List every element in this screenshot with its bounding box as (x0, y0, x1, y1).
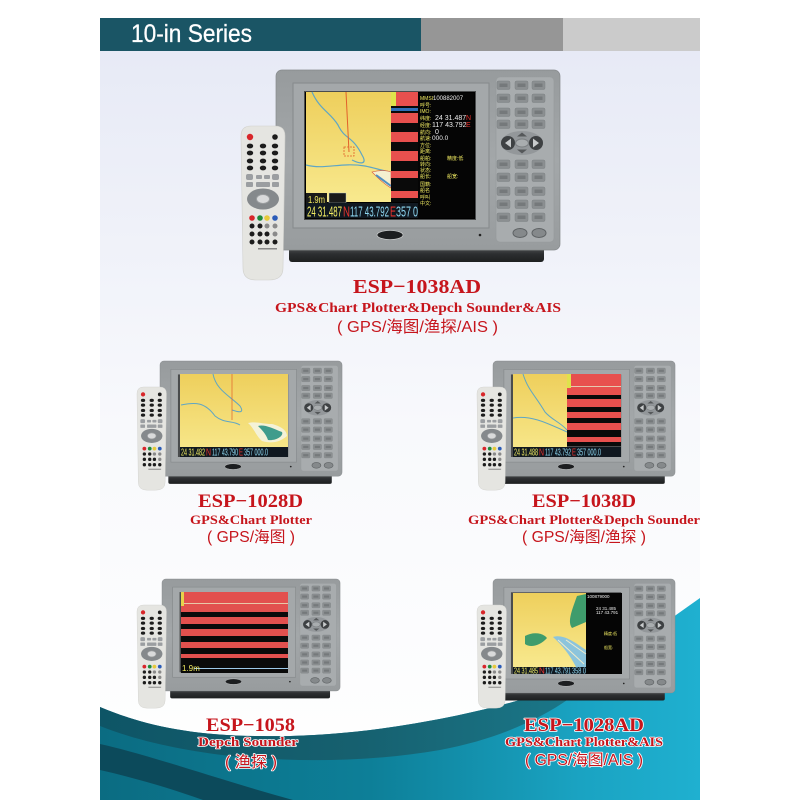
screen: chart, sounder and AIS: 100882007 (433, 96, 464, 102)
screen: chart, sounder and AIS: 24 31.487 (435, 115, 466, 122)
screen: chart, sounder and AIS: E (466, 122, 471, 129)
screen: chart and AIS: 100879000 (587, 594, 610, 599)
model name: ESP−1038AD (353, 276, 481, 298)
screen: chart and sounder: N (539, 448, 544, 458)
screen: chart, sounder and AIS: 24 31.487 (307, 204, 342, 220)
screen: chart, sounder and AIS: 精度:低 (447, 155, 463, 162)
device body (276, 70, 560, 262)
screen: chart and AIS (513, 593, 622, 676)
remote control (477, 387, 506, 490)
screen: chart, sounder and AIS (305, 92, 475, 220)
screen: chart, sounder and AIS: N (343, 204, 350, 220)
function description: GPS&Chart Plotter&AIS (505, 734, 663, 749)
screen: chart and AIS: N (539, 666, 545, 676)
screen: chart: N (206, 448, 211, 458)
function description: GPS&Chart Plotter&Depch Sounder (468, 512, 700, 527)
background panel (100, 51, 700, 800)
screen: chart, sounder and AIS: 距离: (420, 148, 431, 155)
screen: chart: E (239, 448, 243, 458)
screen: chart, sounder and AIS: 船长: (420, 173, 431, 180)
screen: chart, sounder and AIS: 呼号: (420, 102, 431, 109)
screen: chart, sounder and AIS: IMO: (420, 109, 431, 115)
chinese description: ( GPS/海图/AIS ) (525, 751, 643, 769)
screen: chart, sounder and AIS: MMSI: (420, 96, 434, 102)
screen: chart, sounder and AIS: 船名 (420, 187, 430, 194)
header bar (100, 18, 700, 51)
screen: chart and sounder: 117 43.792 (545, 448, 571, 458)
screen: chart, sounder and AIS: 方位: (420, 142, 431, 149)
screen: chart: 117 43.790 (212, 448, 238, 458)
screen: chart, sounder and AIS: 航速: (420, 135, 431, 142)
screen: chart, sounder and AIS: 船宽: (447, 173, 458, 180)
remote control (477, 605, 506, 708)
screen: sounder (181, 592, 288, 673)
screen: chart and sounder (513, 374, 621, 458)
device body (493, 579, 675, 701)
screen: chart and AIS: 船宽: (604, 644, 613, 650)
screen: chart, sounder and AIS: 经度: (420, 122, 431, 129)
function description: GPS&Chart Plotter (190, 512, 312, 527)
remote control (137, 605, 166, 708)
chinese description: ( GPS/海图/渔探 ) (522, 528, 646, 546)
screen: chart, sounder and AIS: 117 43.792 (432, 122, 467, 129)
remote control (241, 126, 285, 280)
product: ESP-1038D (468, 361, 700, 546)
heading: 10-in Series (131, 20, 252, 48)
screen: chart, sounder and AIS: 纬度: (420, 115, 431, 122)
screen: chart, sounder and AIS: 1.9m (308, 195, 325, 206)
screen: chart: 24 31.482 (181, 448, 205, 458)
model name: ESP−1038D (532, 491, 636, 512)
model name: ESP−1058 (206, 715, 295, 736)
device body (160, 361, 342, 484)
chinese description: ( GPS/海图/渔探/AIS ) (337, 318, 498, 336)
screen: chart and AIS: 24 31.485 (596, 606, 617, 611)
screen: chart, sounder and AIS: 0 (413, 204, 418, 220)
screen: chart, sounder and AIS: 国籍: (420, 181, 431, 188)
screen: chart, sounder and AIS: 航向: (420, 129, 431, 136)
screen: chart and sounder: 24 31.488 (514, 448, 538, 458)
screen: sounder: 1.9m (182, 664, 200, 673)
screen: chart, sounder and AIS: 转向: (420, 161, 431, 168)
screen: chart, sounder and AIS: 船舶: (420, 155, 431, 162)
screen: chart, sounder and AIS: 呼叫 (420, 194, 430, 201)
chinese description: ( 渔探 ) (225, 753, 277, 771)
device body (162, 579, 340, 698)
function description: Depch Sounder (198, 734, 298, 749)
screen: chart and sounder: E (572, 448, 576, 458)
screen: chart, sounder and AIS: 117 43.792 (350, 204, 389, 220)
screen: chart and AIS: 精度:低 (604, 630, 617, 636)
product: ESP-1038AD (241, 70, 561, 336)
product: ESP-1058 (137, 579, 340, 771)
remote control (137, 387, 166, 490)
bottom wave (100, 598, 700, 800)
screen: chart, sounder and AIS: N (466, 115, 471, 122)
model name: ESP−1028D (198, 491, 303, 512)
screen: chart and AIS: 358 0 (572, 666, 586, 676)
screen: chart, sounder and AIS: 中文: (420, 200, 431, 207)
screen: chart and AIS: 117 43.791 (596, 610, 619, 615)
chinese description: ( GPS/海图 ) (207, 528, 295, 546)
product: ESP-1028D (137, 361, 342, 546)
screen: chart, sounder and AIS: 0 (435, 129, 439, 136)
screen: chart, sounder and AIS: 000.0 (432, 135, 449, 142)
function description: GPS&Chart Plotter&Depch Sounder&AIS (275, 301, 561, 316)
screen: chart, sounder and AIS: 状态: (420, 167, 431, 174)
screen: chart, sounder and AIS: 357 (396, 204, 411, 220)
model name: ESP−1028AD (524, 715, 644, 736)
product: ESP-1028AD (477, 579, 675, 769)
device body (493, 361, 675, 484)
screen: chart, sounder and AIS: E (390, 204, 396, 220)
screen: chart (180, 374, 288, 458)
screen: chart and sounder: 357 000.0 (577, 448, 601, 458)
screen: chart and AIS: 24 31.485 (514, 666, 538, 676)
screen: chart and AIS: 117 43.791 (545, 666, 571, 676)
screen: chart: 357 000.0 (244, 448, 268, 458)
